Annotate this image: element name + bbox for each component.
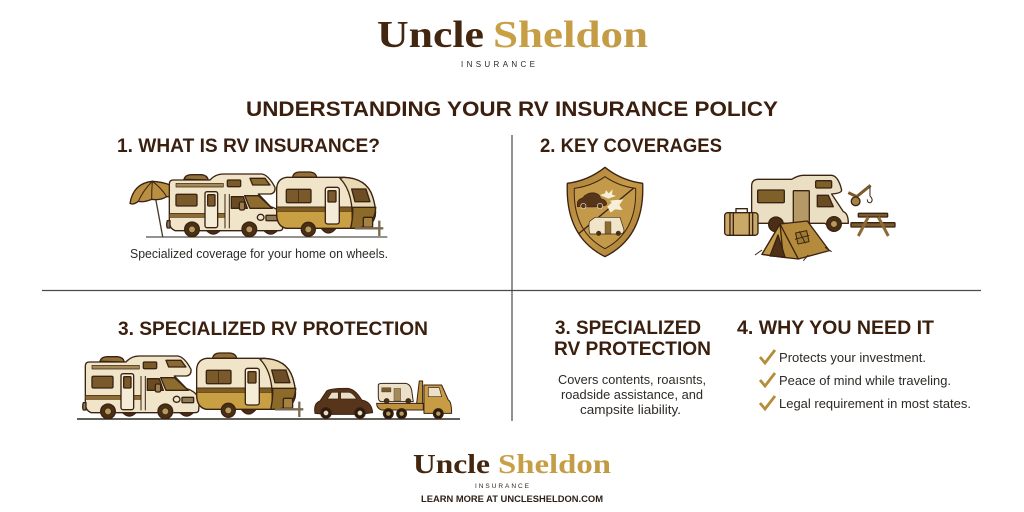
illustration: RV, trailer, car and tow truck bbox=[77, 353, 460, 419]
quadrant dividers bbox=[42, 135, 981, 421]
check item: legal requirement: Legal requirement in most states. bbox=[779, 397, 971, 411]
check item: peace of mind: Peace of mind while traveling. bbox=[779, 374, 951, 388]
RV bbox=[752, 175, 848, 232]
illustration: RV and trailer at beach umbrella bbox=[130, 172, 387, 237]
footer logo: Sheldon bbox=[498, 449, 611, 479]
heading: what is RV insurance: 1. WHAT IS RV INSURANCE? bbox=[117, 135, 380, 157]
illustration: RV, luggage, tent, tow hook and picnic table bbox=[725, 175, 895, 261]
icon: shield with car and RV bbox=[567, 167, 643, 257]
check item: investment: Protects your investment. bbox=[779, 351, 926, 365]
tow truck carrying RV bbox=[377, 381, 452, 419]
top logo: Uncle bbox=[377, 14, 484, 56]
heading: why you need it: 4. WHY YOU NEED IT bbox=[737, 317, 934, 339]
title: UNDERSTANDING YOUR RV INSURANCE POLICY bbox=[246, 97, 778, 121]
heading: key coverages: 2. KEY COVERAGES bbox=[540, 135, 722, 157]
trailer bbox=[197, 353, 303, 417]
top logo: INSURANCE bbox=[461, 60, 535, 69]
panel: specialized RV protection text bbox=[554, 317, 711, 417]
panel: why you need it bbox=[737, 317, 971, 411]
panel: what is RV insurance bbox=[117, 135, 388, 261]
description: Covers contents, roaısnts, bbox=[558, 373, 706, 387]
heading: specialized RV protection: 3. SPECIALIZED RV PROTECTION bbox=[118, 318, 428, 340]
description bbox=[558, 373, 706, 417]
footer logo bbox=[413, 449, 611, 490]
top logo: Sheldon bbox=[493, 14, 648, 56]
car bbox=[315, 388, 373, 418]
description: roadside assistance, and bbox=[561, 388, 703, 402]
description: campsite liability. bbox=[580, 403, 681, 417]
heading: specialized RV protection, two lines bbox=[554, 317, 711, 360]
suitcase bbox=[725, 209, 758, 235]
footer call to action: LEARN MORE AT UNCLESHELDON.COM bbox=[421, 494, 603, 505]
footer logo: INSURANCE bbox=[475, 483, 530, 490]
description: Specialized coverage for your home on wheels. bbox=[130, 247, 388, 261]
heading: specialized RV protection, two lines: 3. SPECIALIZED bbox=[555, 317, 701, 339]
top logo bbox=[377, 14, 648, 69]
tent bbox=[755, 221, 832, 261]
tow hook bbox=[848, 185, 872, 206]
picnic table bbox=[851, 213, 895, 236]
panel: key coverages bbox=[540, 135, 895, 261]
checklist bbox=[760, 350, 971, 411]
heading: specialized RV protection, two lines: RV PROTECTION bbox=[554, 338, 711, 360]
footer logo: Uncle bbox=[413, 449, 490, 479]
motorhome bbox=[83, 356, 199, 419]
panel: specialized RV protection illustration bbox=[77, 318, 460, 419]
